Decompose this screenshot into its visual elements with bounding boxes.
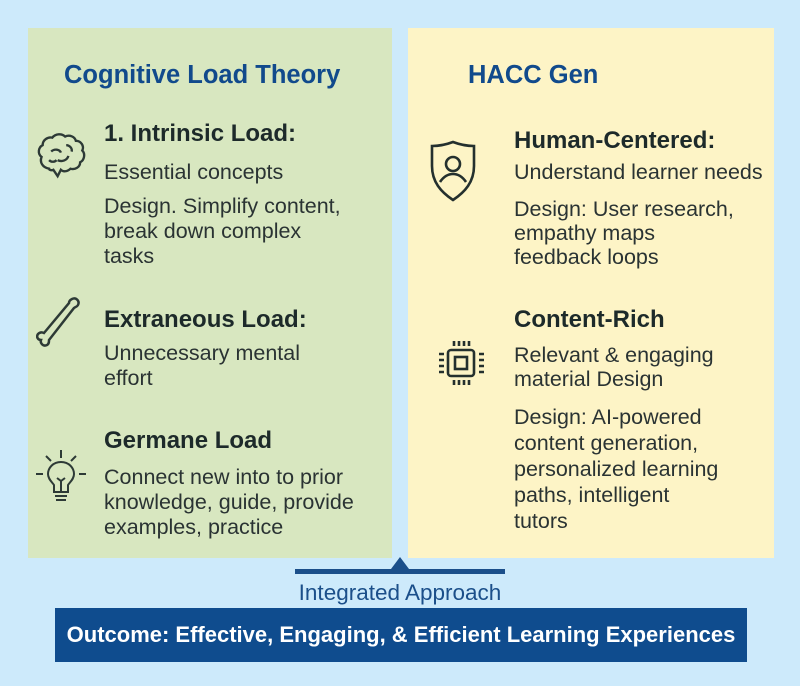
extraneous load: Unnecessary mental xyxy=(104,341,300,365)
intrinsic load: Essential concepts xyxy=(104,160,283,184)
human-centered: Human-Centered: xyxy=(514,127,715,154)
icon: brain xyxy=(38,133,86,178)
icon: lightbulb xyxy=(36,450,86,501)
intrinsic load: break down complex xyxy=(104,219,301,243)
title: hacc gen: HACC Gen xyxy=(468,61,598,89)
panel: cognitive load theory xyxy=(28,28,392,558)
content-rich: content generation, xyxy=(514,431,698,455)
content-rich: Relevant & engaging xyxy=(514,343,714,367)
content-rich: Content-Rich xyxy=(514,306,665,333)
intrinsic load: Design. Simplify content, xyxy=(104,194,341,218)
human-centered: Design: User research, xyxy=(514,197,734,221)
intrinsic load xyxy=(104,120,341,268)
germane load: Germane Load xyxy=(104,427,272,454)
germane load: examples, practice xyxy=(104,515,283,539)
human-centered xyxy=(514,127,763,269)
content-rich: paths, intelligent xyxy=(514,483,669,507)
human-centered: Understand learner needs xyxy=(514,160,763,184)
icon: bone xyxy=(36,297,80,347)
content-rich: personalized learning xyxy=(514,457,718,481)
germane load: knowledge, guide, provide xyxy=(104,490,354,514)
content-rich xyxy=(514,306,718,533)
title: cognitive load theory: Cognitive Load Theory xyxy=(64,61,340,89)
extraneous load: Extraneous Load: xyxy=(104,306,307,333)
intrinsic load: 1. Intrinsic Load: xyxy=(104,120,296,147)
extraneous load xyxy=(104,306,307,390)
label: integrated approach: Integrated Approach xyxy=(299,580,501,605)
germane load: Connect new into to prior xyxy=(104,465,343,489)
outcome banner: Outcome: Effective, Engaging, & Efficient Learning Experiences xyxy=(67,622,735,647)
outcome banner xyxy=(55,608,747,662)
panel: hacc gen xyxy=(408,28,774,558)
content-rich: material Design xyxy=(514,367,663,391)
human-centered: empathy maps xyxy=(514,221,655,245)
icon: chip xyxy=(439,341,484,385)
connector: triangle and bar xyxy=(295,557,505,574)
content-rich: tutors xyxy=(514,509,568,533)
extraneous load: effort xyxy=(104,366,153,390)
content-rich: Design: AI-powered xyxy=(514,405,702,429)
icon: shield user xyxy=(430,140,476,202)
germane load xyxy=(104,427,354,539)
intrinsic load: tasks xyxy=(104,244,154,268)
human-centered: feedback loops xyxy=(514,245,659,269)
